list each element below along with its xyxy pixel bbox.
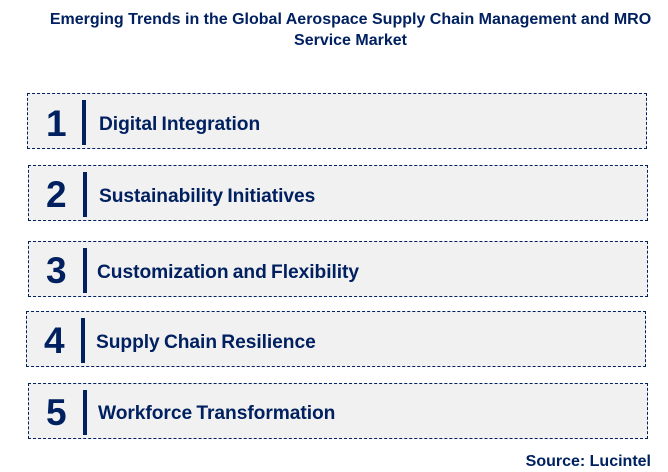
divider bar 4 bbox=[81, 318, 85, 363]
label 1: Digital Integration bbox=[99, 114, 260, 135]
divider bar 3 bbox=[83, 248, 87, 293]
label 5: Workforce Transformation bbox=[98, 403, 335, 424]
divider bar 5 bbox=[83, 390, 87, 435]
divider bar 2 bbox=[83, 172, 87, 217]
panel: trend 3 bbox=[28, 241, 648, 297]
box background 4 bbox=[26, 311, 646, 367]
panel: trend 2 bbox=[28, 165, 648, 221]
title: Service Market bbox=[294, 32, 407, 49]
box background 1 bbox=[27, 93, 647, 149]
divider bar 1 bbox=[82, 100, 86, 145]
title bbox=[50, 11, 651, 49]
number 3: 3 bbox=[46, 250, 67, 291]
number 5: 5 bbox=[46, 392, 67, 433]
number 1: 1 bbox=[46, 103, 67, 144]
label 2: Sustainability Initiatives bbox=[99, 186, 315, 207]
panel: trend 1 bbox=[27, 93, 647, 149]
number 2: 2 bbox=[46, 174, 67, 215]
label 4: Supply Chain Resilience bbox=[96, 332, 316, 353]
source credit: Source: Lucintel bbox=[526, 453, 651, 470]
box background 5 bbox=[28, 383, 648, 439]
label 3: Customization and Flexibility bbox=[97, 262, 359, 283]
panel: trend 5 bbox=[28, 383, 648, 439]
title: Emerging Trends in the Global Aerospace Supply Chain Management and MRO bbox=[50, 11, 651, 28]
panel: trend 4 bbox=[26, 311, 646, 367]
number 4: 4 bbox=[44, 320, 65, 361]
box background 2 bbox=[28, 165, 648, 221]
box background 3 bbox=[28, 241, 648, 297]
